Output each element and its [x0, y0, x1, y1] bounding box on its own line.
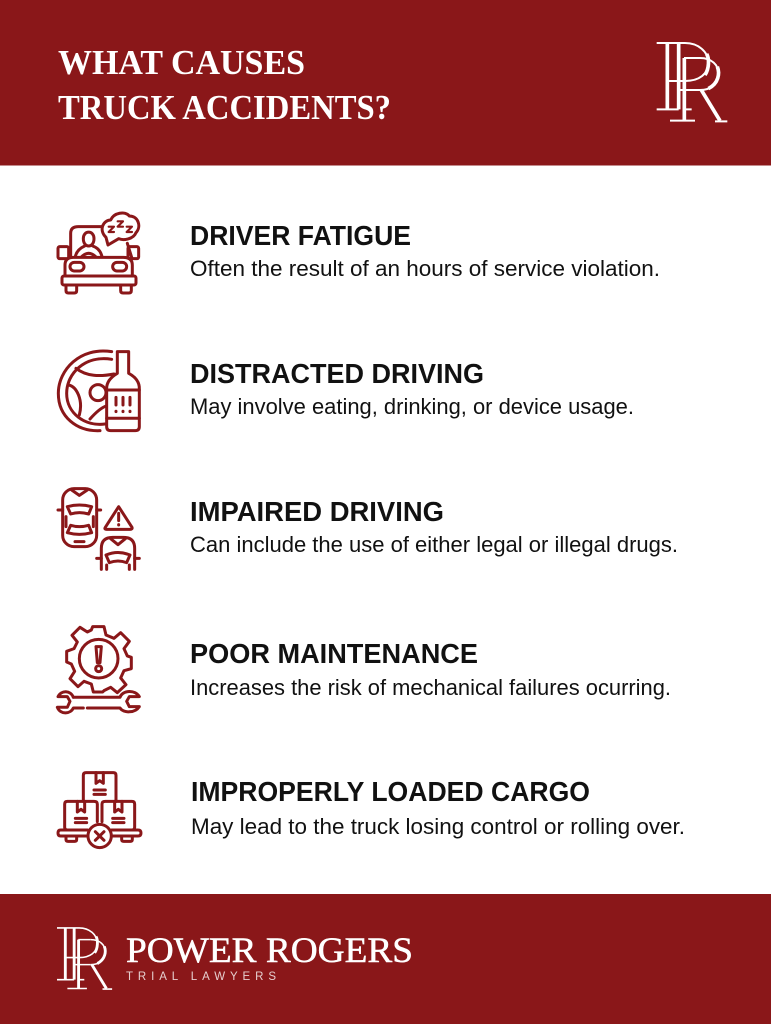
icon: gear and wrench — [57, 627, 139, 713]
logo: header monogram — [657, 43, 727, 121]
description: May involve eating, drinking, or device usage. — [190, 394, 634, 419]
row: poor maintenance — [57, 627, 671, 713]
heading: DISTRACTED DRIVING — [190, 358, 484, 389]
row: impaired driving — [58, 489, 678, 569]
tagline: TRIAL LAWYERS — [126, 971, 276, 983]
heading: IMPROPERLY LOADED CARGO — [191, 776, 590, 807]
row: driver fatigue — [58, 213, 660, 293]
icon: boxes on pallet — [58, 773, 141, 848]
icon: cars and warning sign — [58, 489, 139, 569]
company name: POWER ROGERS — [126, 930, 413, 970]
heading: DRIVER FATIGUE — [190, 220, 411, 251]
logo: footer monogram — [57, 928, 112, 989]
description: May lead to the truck losing control or rolling over. — [191, 814, 685, 839]
title: WHAT CAUSES — [58, 43, 305, 82]
row: improperly loaded cargo — [58, 773, 685, 848]
description: Often the result of an hours of service violation. — [190, 256, 660, 281]
description: Can include the use of either legal or illegal drugs. — [190, 532, 678, 557]
row: distracted driving — [58, 351, 634, 431]
title: TRUCK ACCIDENTS? — [58, 88, 391, 127]
header band — [0, 0, 771, 166]
footer band — [0, 894, 771, 1024]
title — [58, 43, 391, 127]
description: Increases the risk of mechanical failures ocurring. — [190, 675, 671, 700]
icon: steering wheel and bottle — [58, 351, 139, 431]
icon: car with sleepy driver — [58, 213, 139, 293]
heading: IMPAIRED DRIVING — [190, 496, 444, 527]
heading: POOR MAINTENANCE — [190, 638, 478, 669]
